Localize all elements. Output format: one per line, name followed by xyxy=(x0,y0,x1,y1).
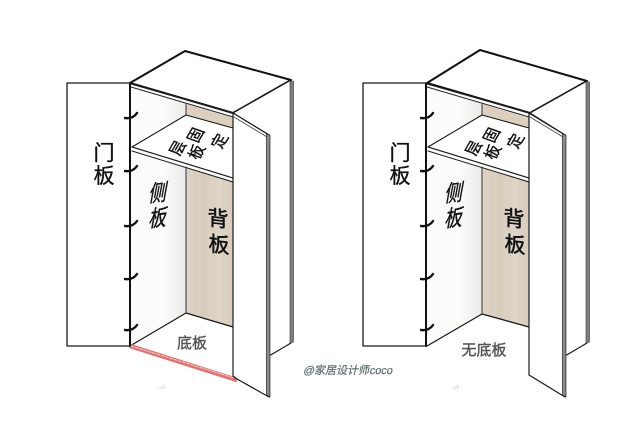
hinge line xyxy=(129,84,131,346)
label: door panel: 板 xyxy=(94,165,114,188)
faint mark xyxy=(157,384,165,389)
right wardrobe: no bottom panel xyxy=(363,50,590,397)
left side panel lower xyxy=(426,150,482,346)
shelf front edge xyxy=(132,147,233,182)
label: door panel xyxy=(94,142,114,188)
back panel lower xyxy=(186,167,233,327)
label: side panel: 侧 xyxy=(443,180,466,208)
top panel xyxy=(130,51,291,113)
label: side panel: 板 xyxy=(443,205,466,233)
watermark: @家居设计师coco xyxy=(302,363,394,377)
label: door panel: 门 xyxy=(390,142,410,165)
top panel xyxy=(427,50,587,113)
label: side panel: 侧 xyxy=(147,180,170,208)
label: fixed shelf xyxy=(463,126,529,162)
floor line xyxy=(427,314,529,346)
label: back panel xyxy=(207,206,230,258)
wood grain xyxy=(491,170,520,325)
label: back panel: 板 xyxy=(208,232,230,258)
back panel upper xyxy=(482,104,529,128)
label: back panel: 板 xyxy=(504,232,526,258)
top front edge xyxy=(427,84,529,117)
floor xyxy=(130,313,233,379)
right door top edge xyxy=(234,117,267,137)
shelf xyxy=(428,115,529,178)
label: back panel: 背 xyxy=(207,206,229,232)
right side panel xyxy=(530,81,587,356)
left door xyxy=(363,83,426,346)
back panel lower xyxy=(482,167,529,327)
left wardrobe: with bottom panel xyxy=(67,51,294,397)
label: no bottom panel: 无底板 xyxy=(461,341,507,359)
label: fixed shelf: 层 xyxy=(167,139,191,158)
hinges xyxy=(125,113,137,330)
label: side panel: 板 xyxy=(147,205,170,233)
right door edge xyxy=(562,134,566,397)
shelf front edge xyxy=(428,147,529,182)
back panel upper xyxy=(186,104,233,128)
label: side panel xyxy=(443,180,466,233)
back corner line xyxy=(185,104,187,313)
top front edge xyxy=(131,84,233,117)
left door xyxy=(67,83,130,346)
bottom panel red edge xyxy=(130,346,237,380)
right side panel xyxy=(233,80,291,356)
hinge line xyxy=(425,84,427,346)
label: fixed shelf: 板 xyxy=(481,142,506,162)
back corner line xyxy=(481,104,483,314)
right door xyxy=(529,113,565,397)
wood grain xyxy=(195,170,224,325)
side panel edge xyxy=(290,81,294,343)
right door edge xyxy=(266,134,270,397)
faint mark xyxy=(451,384,459,389)
label: fixed shelf: 层 xyxy=(463,139,487,158)
hinges xyxy=(421,113,433,330)
label: fixed shelf: 固 xyxy=(185,126,209,145)
label: fixed shelf xyxy=(167,126,233,162)
label: door panel: 门 xyxy=(94,142,114,165)
left side panel upper xyxy=(426,88,482,147)
right door xyxy=(233,113,269,397)
shelf xyxy=(132,115,233,178)
left side panel lower xyxy=(130,150,186,346)
label: fixed shelf: 定 xyxy=(208,132,233,151)
right door top edge xyxy=(530,117,563,137)
label: side panel xyxy=(147,180,170,233)
label: back panel: 背 xyxy=(503,206,525,232)
label: bottom panel: 底板 xyxy=(177,334,207,352)
label: door panel xyxy=(390,142,410,188)
label: fixed shelf: 定 xyxy=(504,132,529,151)
label: fixed shelf: 固 xyxy=(481,126,505,145)
left side panel upper xyxy=(130,88,186,147)
label: back panel xyxy=(503,206,526,258)
label: door panel: 板 xyxy=(390,165,410,188)
label: fixed shelf: 板 xyxy=(185,142,210,162)
side panel edge xyxy=(586,82,590,343)
